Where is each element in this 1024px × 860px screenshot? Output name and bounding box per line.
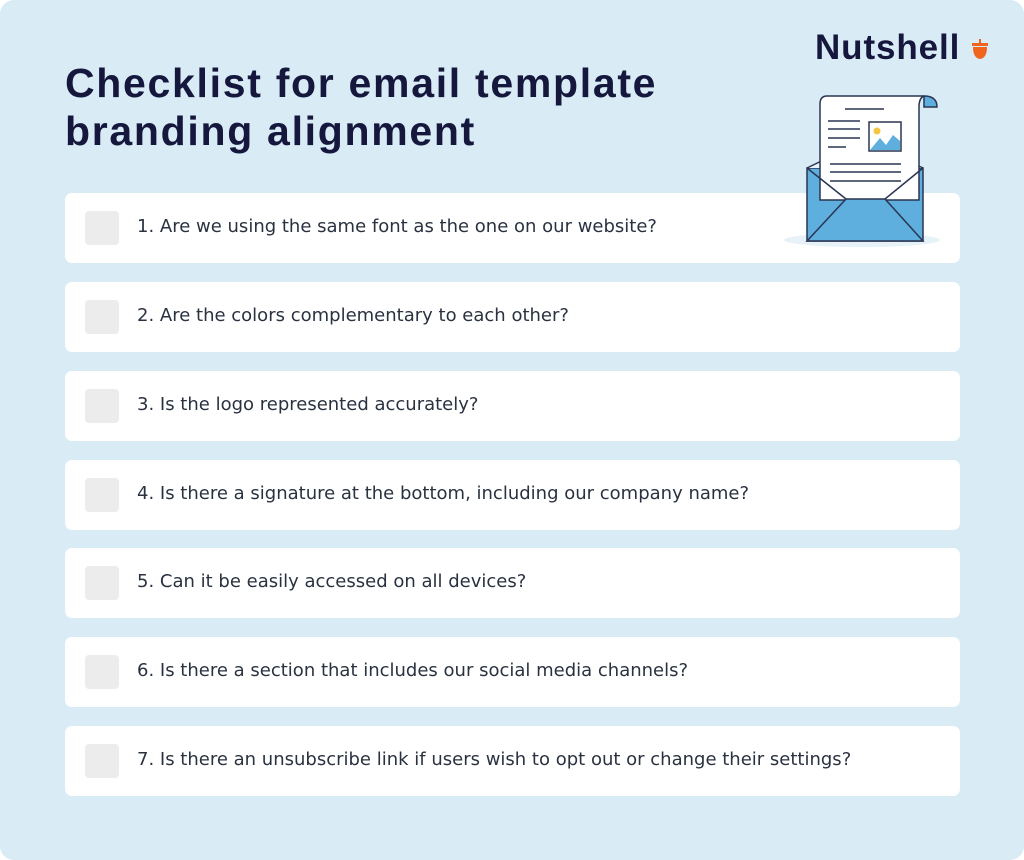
card 6: 6. Is there a section that includes our social media channels? xyxy=(137,660,688,681)
icon: envelope with letter xyxy=(784,95,940,247)
card 7 xyxy=(65,726,960,796)
card 1: 1. Are we using the same font as the one on our website? xyxy=(137,216,657,237)
card 4 xyxy=(65,460,960,530)
card 2: 2. Are the colors complementary to each other? xyxy=(137,305,569,326)
card 3 xyxy=(65,371,960,441)
card 5: 5. Can it be easily accessed on all devices? xyxy=(137,571,526,592)
card 7: 7. Is there an unsubscribe link if users wish to opt out or change their settings? xyxy=(137,749,851,770)
logo: Nutshell: Nutshell xyxy=(815,28,960,67)
title xyxy=(65,60,657,154)
title: Checklist for email template xyxy=(65,60,657,106)
card 1 xyxy=(65,193,960,263)
card 6 xyxy=(65,637,960,707)
card 3: 3. Is the logo represented accurately? xyxy=(137,394,478,415)
title: branding alignment xyxy=(65,108,476,154)
card 5 xyxy=(65,548,960,618)
card 2 xyxy=(65,282,960,352)
card 4: 4. Is there a signature at the bottom, including our company name? xyxy=(137,483,749,504)
